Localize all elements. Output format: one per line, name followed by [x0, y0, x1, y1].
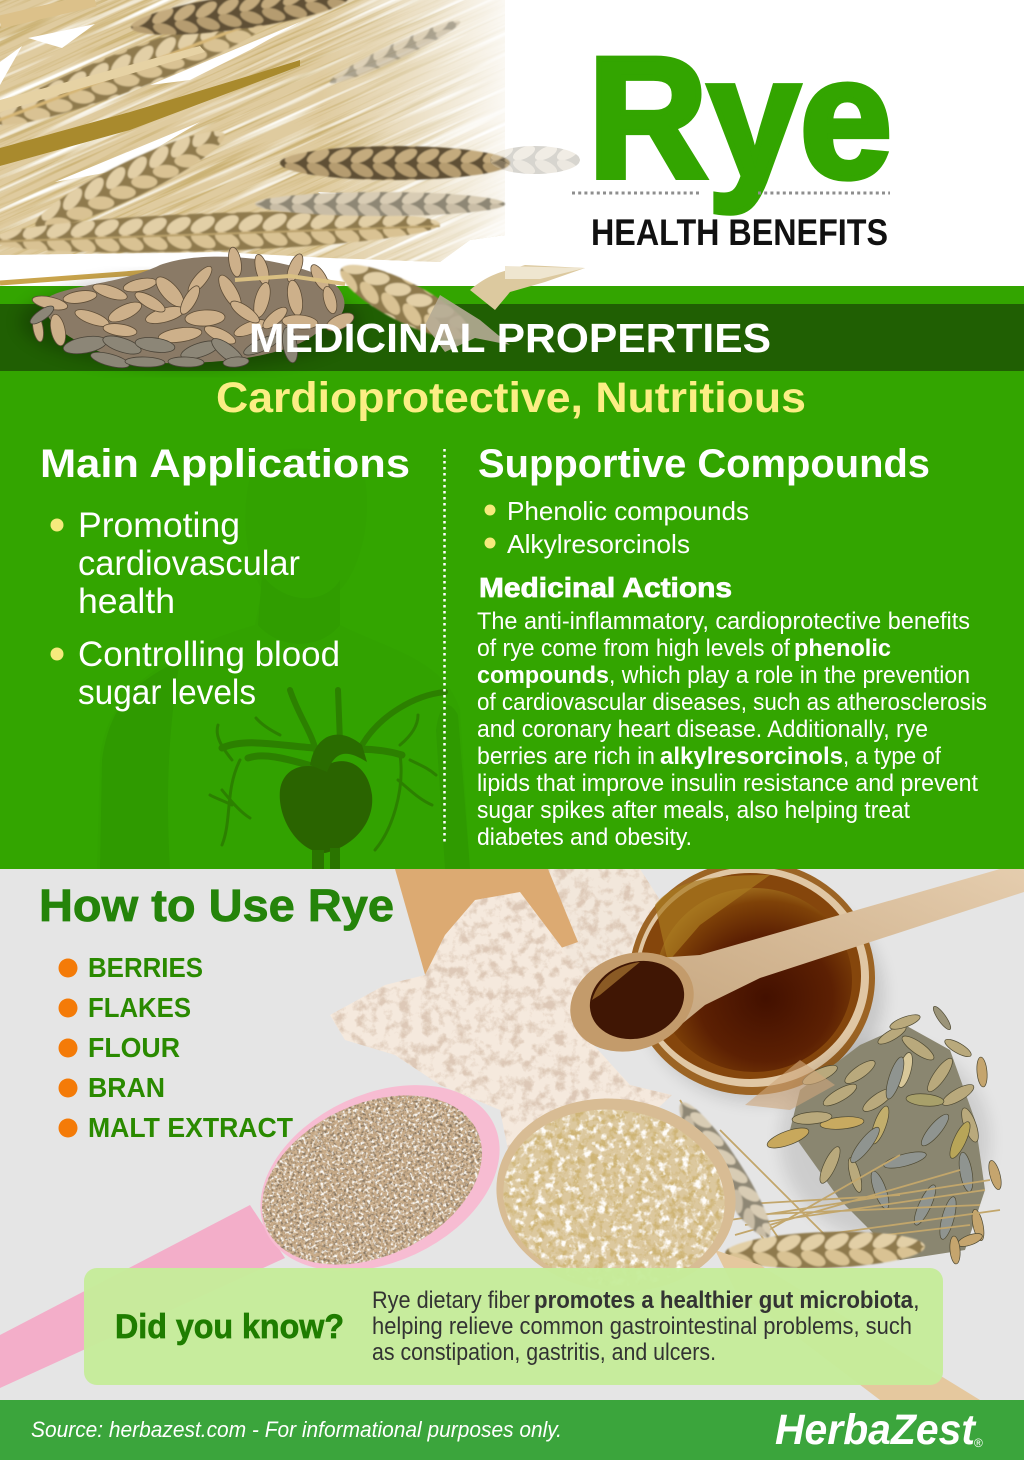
source note: Source: herbazest.com - For informational purposes only.: [31, 1417, 562, 1442]
footer bar: [0, 1400, 1024, 1460]
panel: main applications: [40, 442, 410, 712]
dotted column divider: [443, 449, 446, 843]
paragraph: medicinal actions: sugar spikes after meals, also helping treat: [477, 797, 910, 824]
flour behind scoop: [548, 869, 660, 977]
callout text: helping relieve common gastrointestinal problems, such: [372, 1313, 912, 1340]
title: Rye: Rye: [588, 22, 892, 214]
band: dark green heading band: [0, 304, 1024, 371]
bullet: promoting cardiovascular health: health: [78, 582, 175, 621]
callout text: ,: [913, 1287, 920, 1314]
ear: upper awn ear: [329, 20, 460, 84]
callout: did you know: [84, 1268, 943, 1385]
bowl of malt extract: [629, 861, 884, 1103]
illustration: human torso with heart: [97, 449, 470, 869]
paragraph: medicinal actions: lipids that improve insulin resistance and prevent: [477, 770, 978, 797]
image: fallen wheat ear over band: [332, 251, 585, 353]
paragraph: medicinal actions: phenolic: [794, 635, 891, 662]
compound list: Alkylresorcinols: [507, 529, 690, 559]
list item: flour: FLOUR: [88, 1032, 180, 1063]
heading: main applications: Main Applications: [40, 442, 410, 486]
ear: top: [130, 0, 349, 36]
panel: how to use background: [0, 869, 1024, 1400]
image: food photo collage: [0, 861, 1024, 1400]
wooden bowl of rye flakes: [484, 1083, 980, 1400]
paragraph: medicinal actions: The anti-inflammatory, cardioprotective benefits: [477, 608, 970, 635]
paragraph: medicinal actions: compounds: [477, 662, 609, 689]
wheat ear with awns: [668, 1094, 1000, 1271]
callout heading: Did you know?: [115, 1308, 344, 1346]
heading: supportive compounds: Supportive Compounds: [478, 442, 930, 486]
paragraph: medicinal actions: alkylresorcinols: [660, 743, 843, 770]
paragraph: medicinal actions: of cardiovascular diseases, such as atherosclerosis: [477, 689, 987, 716]
list: forms of rye: [58, 952, 293, 1143]
callout text: [372, 1287, 920, 1366]
wheat straw base: [0, 0, 505, 262]
paragraph: medicinal actions: , a type of: [843, 743, 941, 770]
panel: green medicinal properties background: [0, 286, 1024, 869]
list item: malt extract: MALT EXTRACT: [88, 1112, 293, 1143]
callout text: Rye dietary fiber: [372, 1287, 530, 1314]
bullet: promoting cardiovascular health: [50, 506, 300, 621]
heading: medicinal properties: MEDICINAL PROPERTIES: [249, 315, 771, 361]
paragraph: medicinal actions: and coronary heart disease. Additionally, rye: [477, 716, 928, 743]
ear: right horizontal: [280, 146, 510, 180]
list item: flakes: FLAKES: [88, 992, 191, 1023]
faded ear tip past the white panel: [490, 146, 580, 174]
ear: middle: [34, 130, 225, 228]
list item: bran: [58, 1072, 165, 1103]
bullet: promoting cardiovascular health: cardiovascular: [78, 544, 300, 583]
logo: HerbaZest: HerbaZest: [775, 1406, 977, 1454]
callout text: as constipation, gastritis, and ulcers.: [372, 1339, 716, 1366]
image: rye wheat ears: [0, 0, 580, 286]
rye grains pile: [745, 1004, 1004, 1264]
callout text: promotes a healthier gut microbiota: [534, 1287, 914, 1314]
logo: HerbaZest: ®: [974, 1436, 983, 1450]
compound list: [484, 496, 749, 559]
subheading: medicinal actions: Medicinal Actions: [479, 572, 732, 603]
paragraph: medicinal actions: [477, 608, 987, 851]
wooden scoop: [395, 869, 578, 975]
bullet: controlling blood sugar levels: [50, 635, 340, 712]
ear: upper left: [0, 24, 266, 126]
ear: long lower: [0, 211, 441, 254]
list item: bran: BRAN: [88, 1072, 165, 1103]
bullet: controlling blood sugar levels: sugar levels: [78, 673, 256, 712]
paragraph: medicinal actions: berries are rich in: [477, 743, 655, 770]
bullet: promoting cardiovascular health: Promoting: [78, 506, 240, 545]
ear: top left corner: [0, 0, 95, 22]
stalk across pile: [235, 276, 345, 284]
wooden spoon with syrup: [570, 869, 1024, 1052]
heading: how to use rye: How to Use Rye: [39, 880, 394, 931]
subheading: cardioprotective, nutritious: Cardioprotective, Nutritious: [216, 374, 806, 422]
compound list: Phenolic compounds: [507, 496, 749, 526]
panel: supportive compounds: [477, 442, 987, 851]
paragraph: medicinal actions: , which play a role in the prevention: [609, 662, 970, 689]
bullet: controlling blood sugar levels: Controlling blood: [78, 635, 340, 674]
subtitle: health benefits: HEALTH BENEFITS: [591, 212, 888, 253]
paragraph: medicinal actions: diabetes and obesity.: [477, 824, 692, 851]
image: pile of rye grains: [20, 246, 360, 371]
olive stalk: [0, 60, 300, 166]
pink spoon with rye bran: [0, 1049, 530, 1388]
list item: berries: BERRIES: [88, 952, 203, 983]
paragraph: medicinal actions: of rye come from high levels of: [477, 635, 790, 662]
rye flour pile: [330, 892, 672, 1160]
dotted divider: [572, 192, 890, 194]
